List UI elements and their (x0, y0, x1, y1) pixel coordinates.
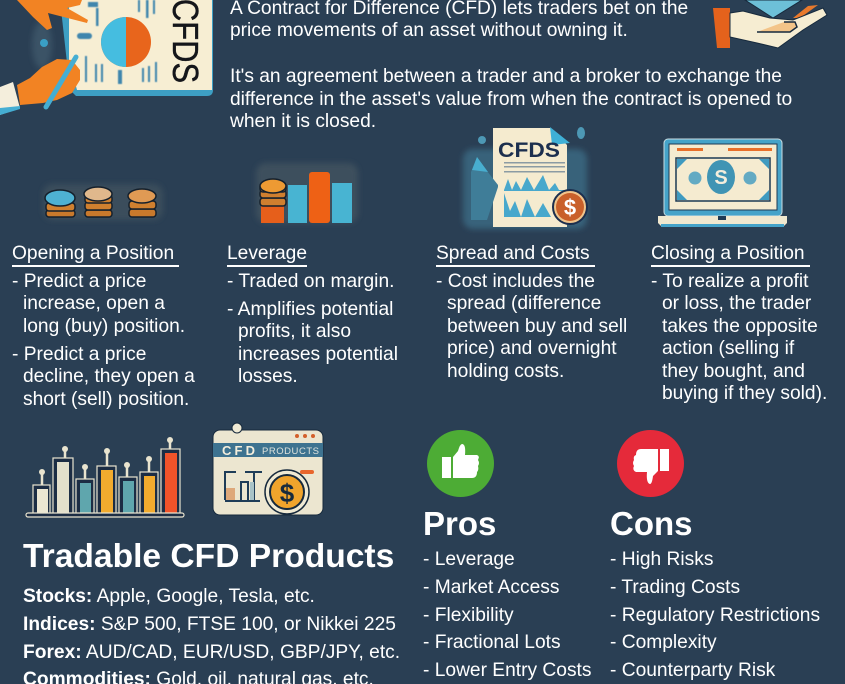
icon: CFDS document: $ (564, 195, 576, 220)
icon: thumbs up (427, 430, 494, 497)
column: Opening a Position: long (buy) position. (23, 316, 185, 337)
icon: laptop with banknote (658, 138, 787, 227)
column: Opening a Position: - Predict a price (12, 271, 146, 292)
column: Opening a Position: Opening a Position (12, 243, 174, 264)
icon: CFDS document (460, 127, 590, 232)
column: Spread and Costs: price) and overnight (447, 338, 617, 359)
column: Opening a Position: - Predict a price (12, 344, 146, 365)
panel: Pros (423, 505, 591, 681)
illustration: hands on CFD tablet (0, 0, 213, 115)
column: Leverage: - Traded on margin. (227, 271, 394, 292)
column: Spread and Costs: between buy and sell (447, 316, 627, 337)
column: Leverage: - Amplifies potential (227, 299, 393, 320)
icon: coin stacks (43, 184, 163, 220)
column: Closing a Position: takes the opposite (662, 316, 818, 337)
panel: Pros: - Leverage (423, 549, 515, 570)
column: Spread and Costs: holding costs. (447, 361, 564, 382)
icon: candlestick chart (25, 437, 185, 518)
intro text: It's an agreement between a trader and a broker to exchange the (230, 66, 782, 87)
product list: Forex: AUD/CAD, EUR/USD, GBP/JPY, etc. (23, 642, 400, 663)
icon: CFD products window: CFD (222, 443, 255, 458)
panel: Cons: - Regulatory Restrictions (610, 605, 820, 626)
icon: thumbs down (617, 430, 684, 497)
column: Spread and Costs: Spread and Costs (436, 243, 590, 264)
icon: CFD products window (212, 422, 324, 516)
icon: coins and bars (255, 162, 359, 224)
icon: laptop with banknote: S (714, 167, 728, 189)
column: Leverage (227, 243, 398, 387)
panel: Pros: - Flexibility (423, 605, 514, 626)
heading: Pros: Pros (423, 505, 496, 542)
column: Opening a Position: increase, open a (23, 293, 165, 314)
panel: Cons: - Counterparty Risk (610, 660, 775, 681)
panel: Cons: - Trading Costs (610, 577, 740, 598)
intro text: when it is closed. (230, 111, 376, 132)
column: Opening a Position (12, 243, 195, 410)
column: Spread and Costs (436, 243, 627, 382)
column: Leverage: profits, it also (238, 321, 351, 342)
product list: Indices: S&P 500, FTSE 100, or Nikkei 225 (23, 614, 396, 635)
intro text: difference in the asset's value from when the contract is opened to (230, 89, 792, 110)
heading: Tradable CFD Products: Tradable CFD Products (23, 538, 394, 575)
illustration: hand holding diamond (713, 0, 828, 48)
column: Leverage: Leverage (227, 243, 307, 264)
product list (23, 586, 400, 684)
column: Opening a Position: short (sell) position. (23, 389, 189, 410)
column: Closing a Position: buying if they sold). (662, 383, 827, 404)
heading: Cons: Cons (610, 505, 692, 542)
column: Leverage: increases potential (238, 344, 398, 365)
column: Closing a Position: - To realize a profit (651, 271, 808, 292)
icon: CFD products window: PRODUCTS (262, 446, 319, 457)
column: Spread and Costs: - Cost includes the (436, 271, 595, 292)
product list: Stocks: Apple, Google, Tesla, etc. (23, 586, 315, 607)
panel: Cons: - Complexity (610, 632, 717, 653)
intro text (230, 0, 792, 132)
icon: CFD products window: $ (280, 478, 295, 508)
panel: Cons (610, 505, 820, 681)
column: Closing a Position: or loss, the trader (662, 293, 811, 314)
column: Closing a Position: action (selling if (662, 338, 794, 359)
CFDS rotated label: CFDS (165, 0, 206, 83)
panel: Pros: - Market Access (423, 577, 559, 598)
icon: CFDS document: CFDS (498, 139, 560, 162)
intro text: price movements of an asset without owning it. (230, 20, 628, 41)
column: Opening a Position: decline, they open a (23, 366, 195, 387)
column: Closing a Position: they bought, and (662, 361, 805, 382)
column: Spread and Costs: spread (difference (447, 293, 601, 314)
panel: Pros: - Lower Entry Costs (423, 660, 591, 681)
column: Leverage: losses. (238, 366, 298, 387)
panel: Cons: - High Risks (610, 549, 713, 570)
panel: Pros: - Fractional Lots (423, 632, 561, 653)
column: Closing a Position (651, 243, 827, 404)
column: Closing a Position: Closing a Position (651, 243, 805, 264)
